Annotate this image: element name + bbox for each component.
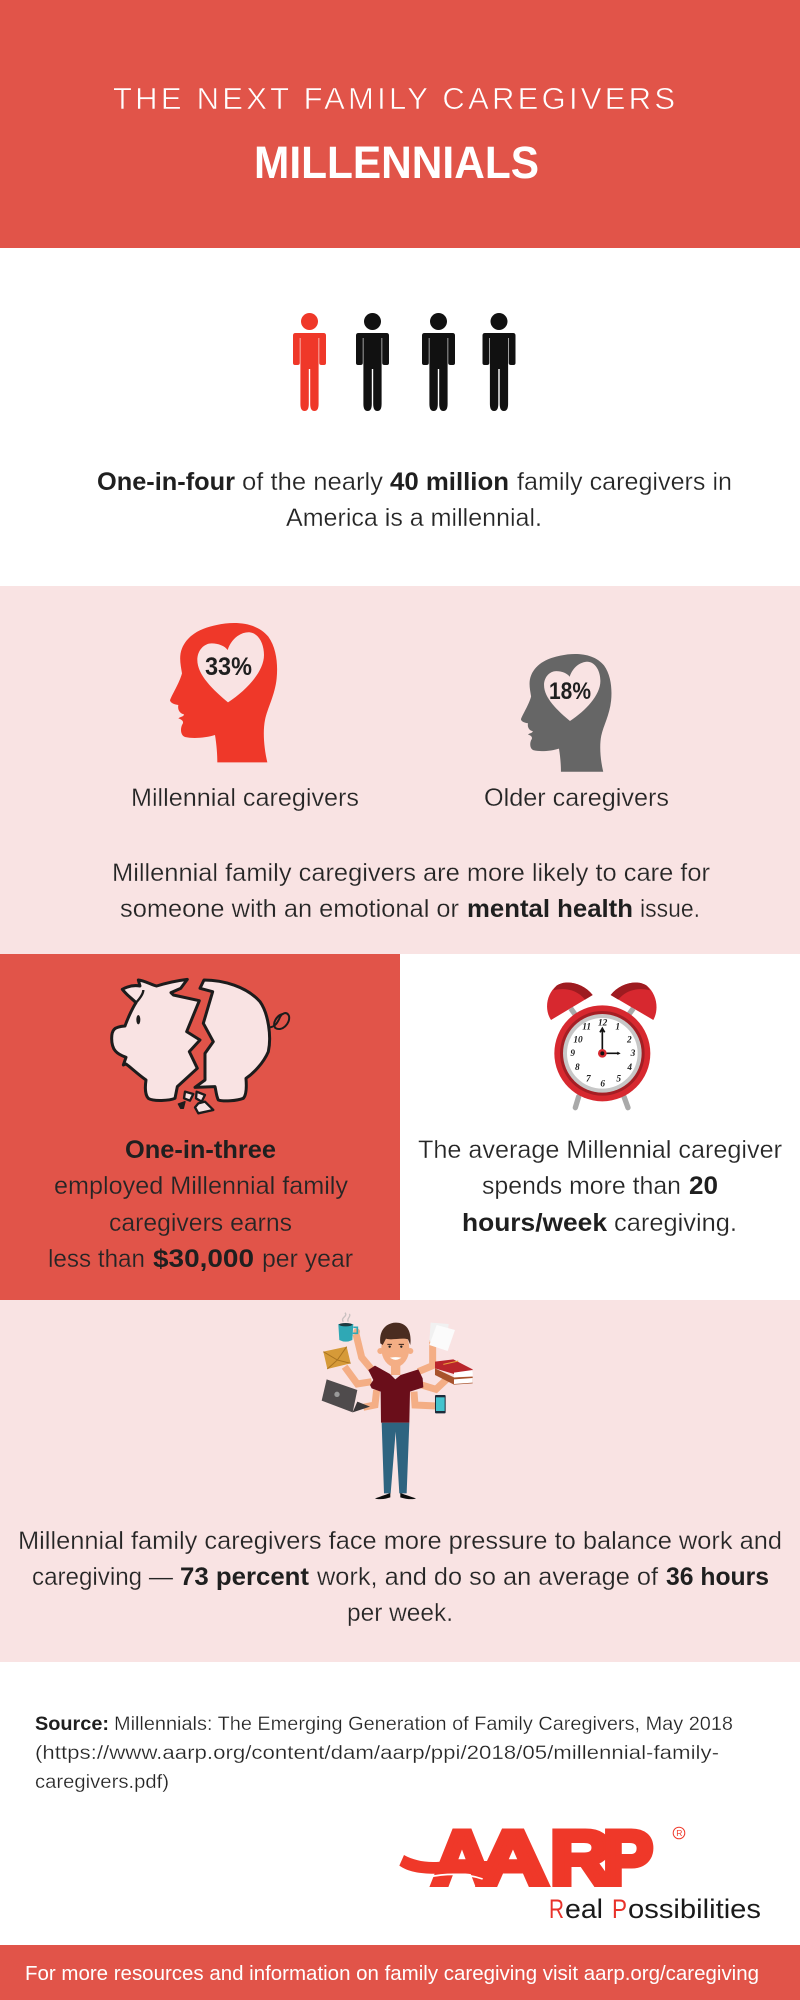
text: mental health statement: someone with an emotional or xyxy=(120,895,459,923)
icon: smartphone xyxy=(435,1395,446,1413)
text: one in four statement: 40 million xyxy=(390,468,509,496)
text: more resources: For more resources and information on family caregiving visit aarp.org/caregiving xyxy=(25,1963,759,1985)
clock numbers: 5 xyxy=(616,1074,621,1084)
text: mental health statement: issue. xyxy=(640,895,700,923)
clock numbers: 2 xyxy=(626,1035,632,1045)
label: older caregivers: Older caregivers xyxy=(484,784,669,812)
icon: broken piggy bank xyxy=(112,979,289,1113)
clock numbers: 3 xyxy=(630,1049,636,1059)
icon: black person 3 xyxy=(422,313,455,411)
panel: header xyxy=(0,0,800,248)
text: twenty hours per week: caregiving. xyxy=(614,1209,737,1237)
text: pressure to balance work and caregiving: 73 percent xyxy=(180,1563,310,1591)
text: source citation xyxy=(35,1714,733,1793)
text: one in three xyxy=(48,1136,353,1273)
text: pressure to balance work and caregiving: Millennial family caregivers face more pressure to balance work and xyxy=(18,1527,782,1555)
title: the next family caregivers: THE NEXT FAMILY CAREGIVERS xyxy=(113,81,675,116)
text: source citation: Source: xyxy=(35,1714,109,1735)
icon: black person 2 xyxy=(356,313,389,411)
logo: AARP xyxy=(399,1816,685,1901)
icon: alarm clock xyxy=(547,983,657,1108)
text: source citation: caregivers.pdf) xyxy=(35,1772,169,1793)
text: source citation: (https://www.aarp.org/content/dam/aarp/ppi/2018/05/millennial-family- xyxy=(35,1743,719,1764)
logo: AARP: R xyxy=(550,1816,612,1901)
panel: one in four xyxy=(0,248,800,586)
text: one in four statement xyxy=(97,468,732,532)
clock numbers: 9 xyxy=(570,1049,575,1059)
icon: red head with heart 33% xyxy=(170,623,277,762)
tagline: real possibilities: eal xyxy=(565,1894,603,1924)
icon: black person 4 xyxy=(482,313,516,411)
icon: books xyxy=(435,1359,473,1385)
text: one in three: less than xyxy=(48,1245,145,1273)
clock numbers: 7 xyxy=(586,1074,591,1084)
tagline: real possibilities: R xyxy=(549,1894,564,1924)
clock numbers: 6 xyxy=(600,1079,605,1089)
text: one in four statement: of the nearly xyxy=(242,468,384,496)
logo: AARP: P xyxy=(603,1816,653,1901)
heading: millennials: MILLENNIALS xyxy=(254,137,539,188)
text: twenty hours per week: spends more than xyxy=(482,1172,681,1200)
tagline: real possibilities: P xyxy=(612,1894,627,1924)
text: mental health statement xyxy=(112,859,710,923)
text: one in four statement: America is a millennial. xyxy=(286,504,542,532)
footer bar xyxy=(0,1945,800,2000)
icon: papers xyxy=(429,1323,455,1351)
icon: four people, one highlighted xyxy=(293,313,516,411)
clock numbers xyxy=(570,1019,636,1089)
text: pressure to balance work and caregiving xyxy=(18,1527,782,1627)
panel: income xyxy=(0,954,400,1300)
tagline: real possibilities: ossibilities xyxy=(628,1894,761,1924)
text: twenty hours per week: The average Millennial caregiver xyxy=(418,1136,782,1164)
logo: AARP: A xyxy=(478,1816,548,1901)
text: twenty hours per week xyxy=(418,1136,782,1237)
icon: gray head with heart 18% xyxy=(521,654,611,772)
icon: laptop xyxy=(322,1379,370,1412)
text: 33%: 33% xyxy=(205,653,252,681)
text: pressure to balance work and caregiving: caregiving — xyxy=(32,1563,173,1591)
text: mental health statement: Millennial family caregivers are more likely to care for xyxy=(112,859,710,887)
text: pressure to balance work and caregiving: 36 hours xyxy=(666,1563,769,1591)
text: 18%: 18% xyxy=(549,678,591,705)
label: millennial caregivers: Millennial caregivers xyxy=(131,784,359,812)
icon: envelope xyxy=(323,1347,351,1369)
panel: hours per week xyxy=(400,954,800,1300)
text: one in three: employed Millennial family xyxy=(54,1172,348,1200)
clock numbers: 4 xyxy=(626,1063,632,1073)
text: twenty hours per week: hours/week xyxy=(462,1209,607,1237)
text: pressure to balance work and caregiving: per week. xyxy=(347,1599,453,1627)
text: pressure to balance work and caregiving: work, and do so an average of xyxy=(316,1563,658,1591)
icon: red person xyxy=(293,313,326,411)
logo: AARP: R xyxy=(676,1828,682,1838)
text: one in four statement: One-in-four xyxy=(97,468,235,496)
clock numbers: 11 xyxy=(582,1023,591,1033)
text: one in three: caregivers earns xyxy=(109,1209,292,1237)
panel: work and caregiving balance xyxy=(0,1300,800,1662)
clock numbers: 10 xyxy=(573,1035,583,1045)
clock numbers: 8 xyxy=(575,1063,580,1073)
text: one in three: per year xyxy=(262,1245,353,1273)
text: one in four statement: family caregivers in xyxy=(517,468,732,496)
clock numbers: 12 xyxy=(598,1019,608,1029)
panel: mental health comparison xyxy=(0,586,800,954)
clock numbers: 1 xyxy=(615,1023,620,1033)
illustration: man juggling tasks with six arms xyxy=(322,1313,473,1499)
text: mental health statement: mental health xyxy=(467,895,633,923)
tagline: real possibilities xyxy=(549,1894,761,1924)
logo: AARP: A xyxy=(432,1816,492,1901)
icon: coffee mug xyxy=(338,1323,357,1342)
text: source citation: Millennials: The Emerging Generation of Family Caregivers, May 2018 xyxy=(114,1714,733,1735)
text: twenty hours per week: 20 xyxy=(689,1172,718,1200)
text: one in three: $30,000 xyxy=(153,1245,254,1273)
text: one in three: One-in-three xyxy=(125,1136,276,1164)
